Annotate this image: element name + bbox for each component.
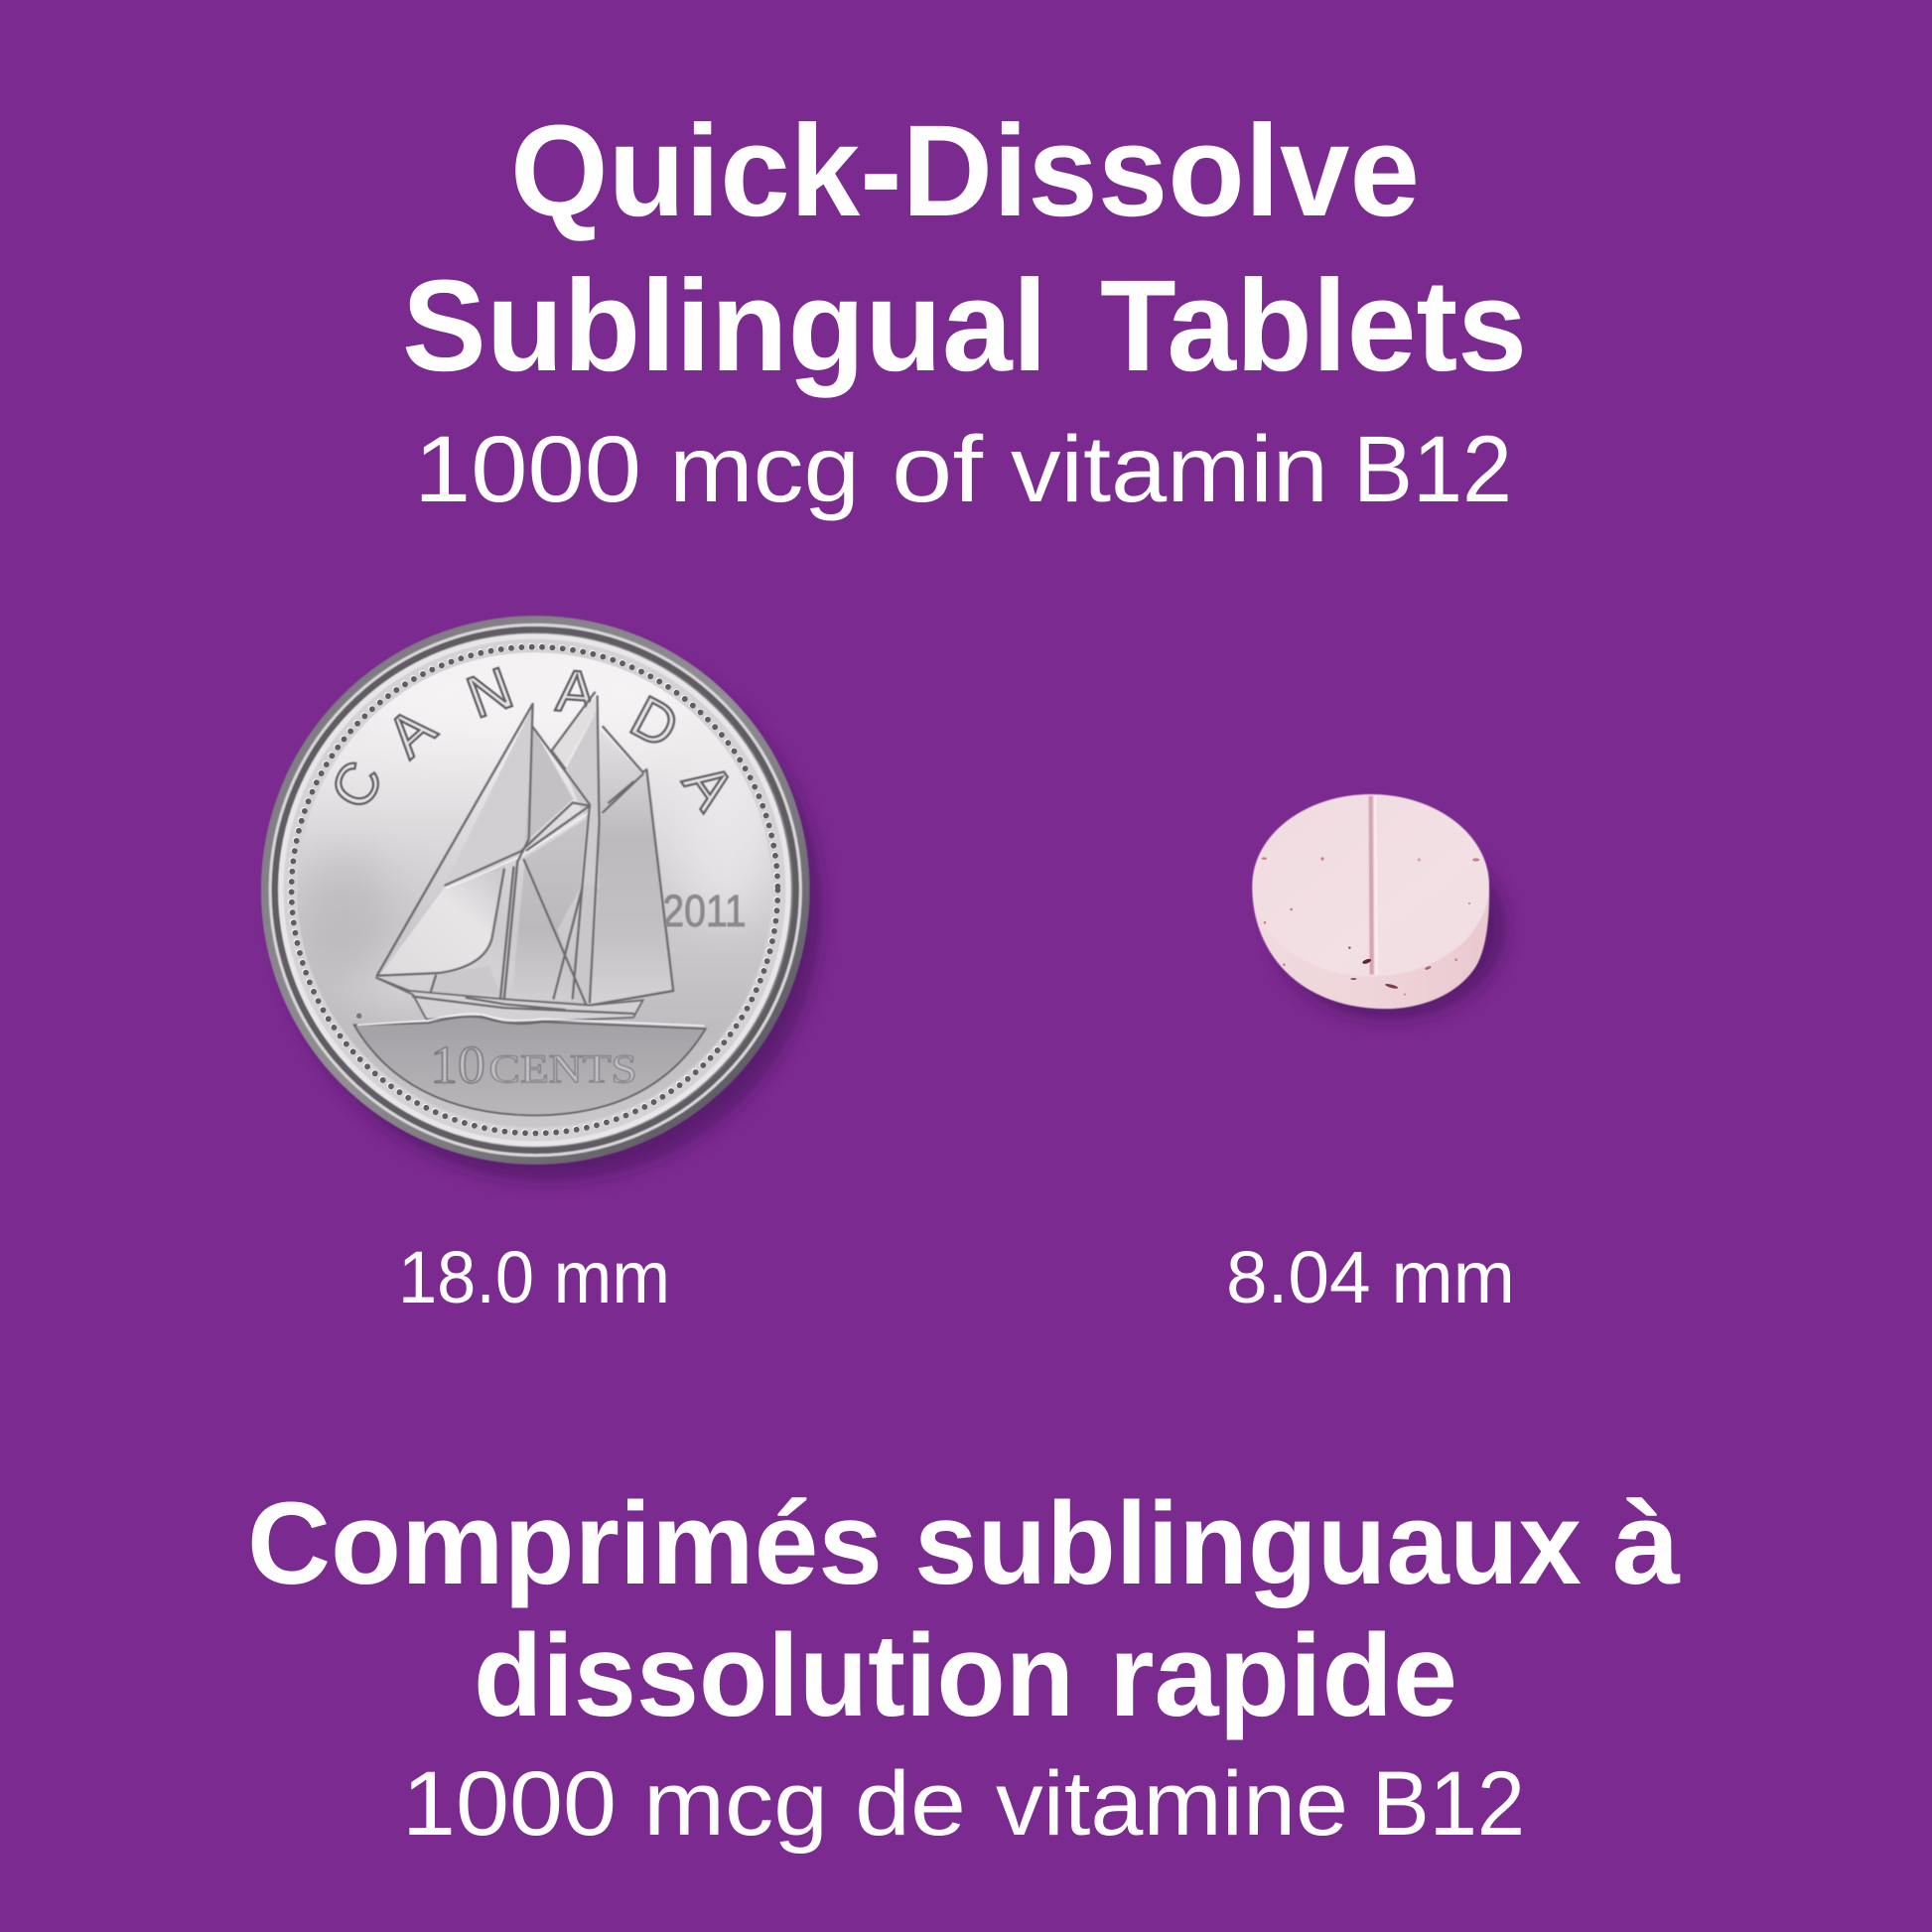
coin schooner <box>376 693 673 1023</box>
french subtitle: 1000 <box>402 1753 617 1855</box>
coin: Canadian 10 cents <box>261 616 821 1180</box>
coin diameter label: 18.0 mm <box>398 1236 670 1318</box>
coin lettering CANADA: N <box>459 654 521 731</box>
french title line 2: dissolution <box>474 1610 1074 1741</box>
french title line 1 <box>247 1478 1680 1609</box>
title line 1: Quick-Dissolve <box>510 97 1420 243</box>
tablet diameter label: 8.04 mm <box>1226 1236 1515 1318</box>
english subtitle <box>414 417 1512 522</box>
coin word CENTS: CENTS <box>489 1046 637 1091</box>
tablet score line <box>1371 796 1372 975</box>
tablet body <box>1252 794 1489 1009</box>
english subtitle: 1000 <box>414 417 641 522</box>
coin sea and denomination <box>354 1014 706 1115</box>
title line 2 word 1: Sublingual <box>402 252 1047 398</box>
french title line 2 <box>474 1610 1457 1741</box>
coin denomination text: 10 <box>430 1035 485 1095</box>
french subtitle: B12 <box>1372 1753 1525 1855</box>
english subtitle: vitamin <box>1011 417 1328 522</box>
french title line 1: à <box>1612 1478 1680 1609</box>
coin rim <box>261 616 810 1165</box>
coin shadow <box>278 637 821 1180</box>
schooner lines <box>447 812 590 889</box>
coin beaded border <box>291 646 777 1133</box>
coin field highlights <box>295 649 770 1010</box>
french subtitle <box>402 1753 1525 1855</box>
coin mint mark <box>356 1014 361 1019</box>
infographic canvas <box>252 121 1680 1854</box>
title line 2 word 2: Tablets <box>1100 252 1527 398</box>
coin lettering CANADA: A <box>670 751 748 822</box>
schooner hull <box>376 978 643 1023</box>
coin lettering CANADA: A <box>374 694 448 770</box>
coin lettering CANADA: A <box>554 656 599 726</box>
tablet shadow <box>1274 834 1506 1020</box>
tablet <box>1252 794 1506 1020</box>
french heading block <box>247 1478 1680 1855</box>
english subtitle: B12 <box>1353 417 1512 522</box>
french subtitle: de <box>855 1753 966 1855</box>
english subtitle: of <box>892 417 984 522</box>
coin year: 2011 <box>662 886 747 936</box>
english heading block <box>402 97 1527 522</box>
tablet speckles <box>1262 857 1479 996</box>
french subtitle: vitamine <box>996 1753 1348 1855</box>
coin lettering CANADA: D <box>621 683 689 761</box>
english subtitle: mcg <box>669 417 860 522</box>
french subtitle: mcg <box>643 1753 828 1855</box>
french title line 1: Comprimés <box>247 1478 883 1609</box>
coin lettering CANADA <box>317 654 748 822</box>
french title line 2: rapide <box>1109 1610 1457 1741</box>
coin lettering CANADA: C <box>317 751 396 819</box>
french title line 1: sublinguaux <box>914 1478 1582 1609</box>
